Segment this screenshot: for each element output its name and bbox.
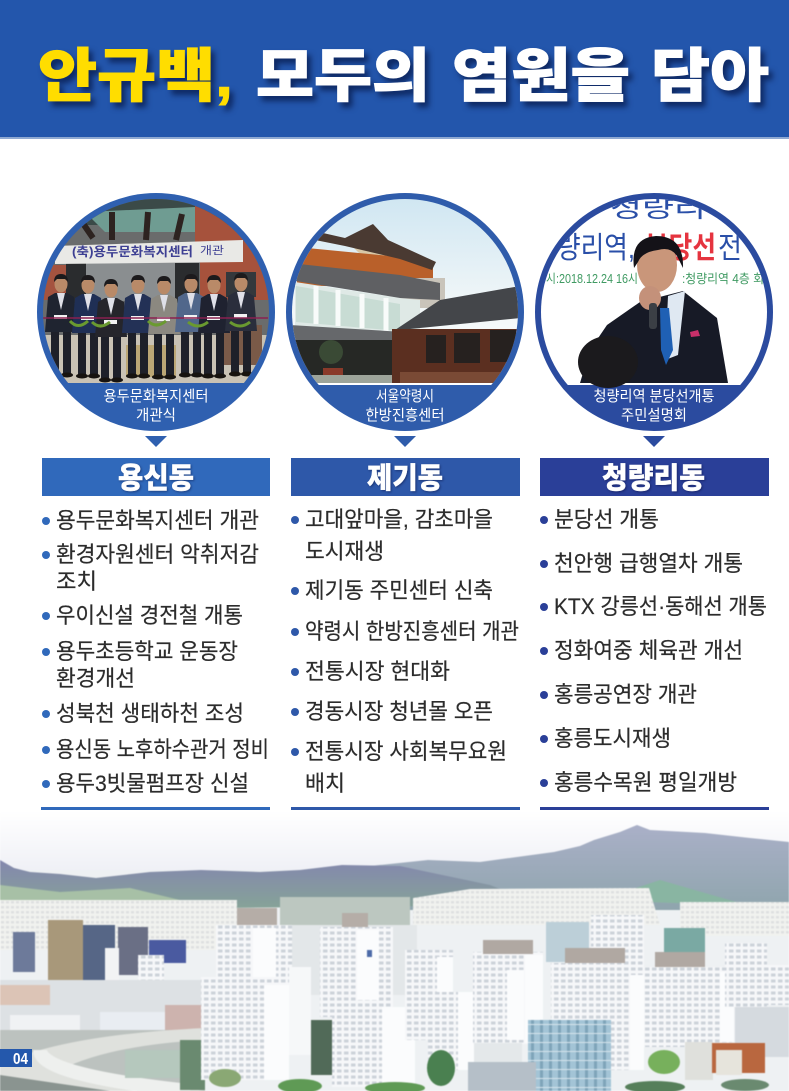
list: 조치 bbox=[56, 569, 97, 594]
panel: 용신동 bbox=[37, 193, 275, 810]
title: 담아 bbox=[651, 44, 769, 109]
title: 염원을 bbox=[452, 44, 630, 109]
heading bar: 용신동 bbox=[118, 462, 194, 495]
caption: 주민설명회 bbox=[621, 407, 687, 424]
circle photo: hanbang center bbox=[285, 193, 525, 431]
backdrop banner text: 청량리 bbox=[610, 193, 706, 223]
title bbox=[38, 44, 769, 109]
list bbox=[291, 507, 520, 810]
city skyline photo bbox=[0, 812, 789, 1091]
ribbon cutting group bbox=[43, 273, 268, 382]
list bbox=[41, 508, 270, 810]
list: 용신동 노후하수관거 정비 bbox=[56, 737, 269, 762]
list: 환경자원센터 악취저감 bbox=[56, 542, 259, 567]
list: 홍릉공연장 개관 bbox=[554, 682, 697, 707]
arrow bbox=[643, 436, 665, 447]
list bbox=[540, 507, 769, 810]
caption: 서울약령시 bbox=[376, 388, 434, 405]
list: 홍릉도시재생 bbox=[554, 726, 671, 751]
caption bbox=[104, 388, 208, 424]
list: 약령시 한방진흥센터 개관 bbox=[305, 619, 519, 644]
list: 배치 bbox=[305, 771, 345, 796]
heading bar bbox=[291, 458, 520, 496]
list: 도시재생 bbox=[305, 539, 384, 564]
list: 성북천 생태하천 조성 bbox=[56, 701, 244, 726]
trees bbox=[209, 1050, 769, 1091]
backdrop banner text: 시:2018.12.24 16시 bbox=[546, 272, 638, 286]
banner bbox=[55, 240, 243, 264]
caption bbox=[594, 388, 714, 424]
hanok roof building bbox=[392, 286, 525, 383]
heading bar: 제기동 bbox=[367, 462, 443, 495]
list: 용두3빗물펌프장 신설 bbox=[56, 771, 249, 796]
backdrop banner text: :청량리역 4층 회 bbox=[682, 272, 764, 286]
arrow bbox=[394, 436, 416, 447]
list: KTX 강릉선·동해선 개통 bbox=[554, 594, 767, 619]
banner: 개관 bbox=[200, 244, 224, 257]
caption bbox=[366, 388, 444, 424]
heading bar bbox=[540, 458, 769, 496]
page number tag bbox=[0, 1049, 32, 1068]
list: 정화여중 체육관 개선 bbox=[554, 638, 743, 663]
list: 홍릉수목원 평일개방 bbox=[554, 770, 737, 795]
list: 우이신설 경전철 개통 bbox=[56, 603, 243, 628]
caption: 한방진흥센터 bbox=[366, 406, 444, 424]
flyover road bbox=[0, 1028, 205, 1091]
heading bar bbox=[42, 458, 270, 496]
banner: (축)용두문화복지센터 bbox=[72, 244, 193, 259]
list: 경동시장 청년몰 오픈 bbox=[305, 699, 493, 724]
backdrop banner text: 전 bbox=[718, 232, 742, 265]
circle photo: speaker bbox=[535, 193, 775, 431]
caption: 청량리역 분당선개통 bbox=[594, 388, 714, 405]
list: 고대앞마을, 감초마을 bbox=[305, 507, 493, 532]
heading bar: 청량리동 bbox=[602, 462, 705, 495]
list: 환경개선 bbox=[56, 666, 135, 691]
speaker bbox=[578, 236, 728, 388]
backdrop banner text: 량리역, bbox=[557, 232, 635, 265]
panel: 제기동 bbox=[285, 193, 525, 810]
caption: 개관식 bbox=[136, 407, 176, 424]
circle photo: ribbon cutting bbox=[37, 193, 275, 431]
list: 전통시장 현대화 bbox=[305, 659, 450, 684]
apartment towers bbox=[201, 908, 789, 1091]
header band bbox=[0, 0, 789, 139]
list: 제기동 주민센터 신축 bbox=[305, 578, 493, 603]
list: 용두문화복지센터 개관 bbox=[56, 508, 259, 533]
list: 용두초등학교 운동장 bbox=[56, 639, 238, 664]
list: 전통시장 사회복무요원 bbox=[305, 739, 507, 764]
backdrop banner text: 분당선 bbox=[645, 232, 716, 265]
list: 천안행 급행열차 개통 bbox=[554, 551, 743, 576]
arrow bbox=[145, 436, 167, 447]
caption: 용두문화복지센터 bbox=[104, 388, 208, 405]
title: 안규백, bbox=[38, 44, 233, 109]
list: 분당선 개통 bbox=[554, 507, 659, 532]
title: 모두의 bbox=[256, 44, 430, 109]
panel: 청량리동 bbox=[535, 193, 775, 810]
backdrop banner text bbox=[546, 193, 764, 286]
page number tag: 04 bbox=[13, 1051, 28, 1068]
